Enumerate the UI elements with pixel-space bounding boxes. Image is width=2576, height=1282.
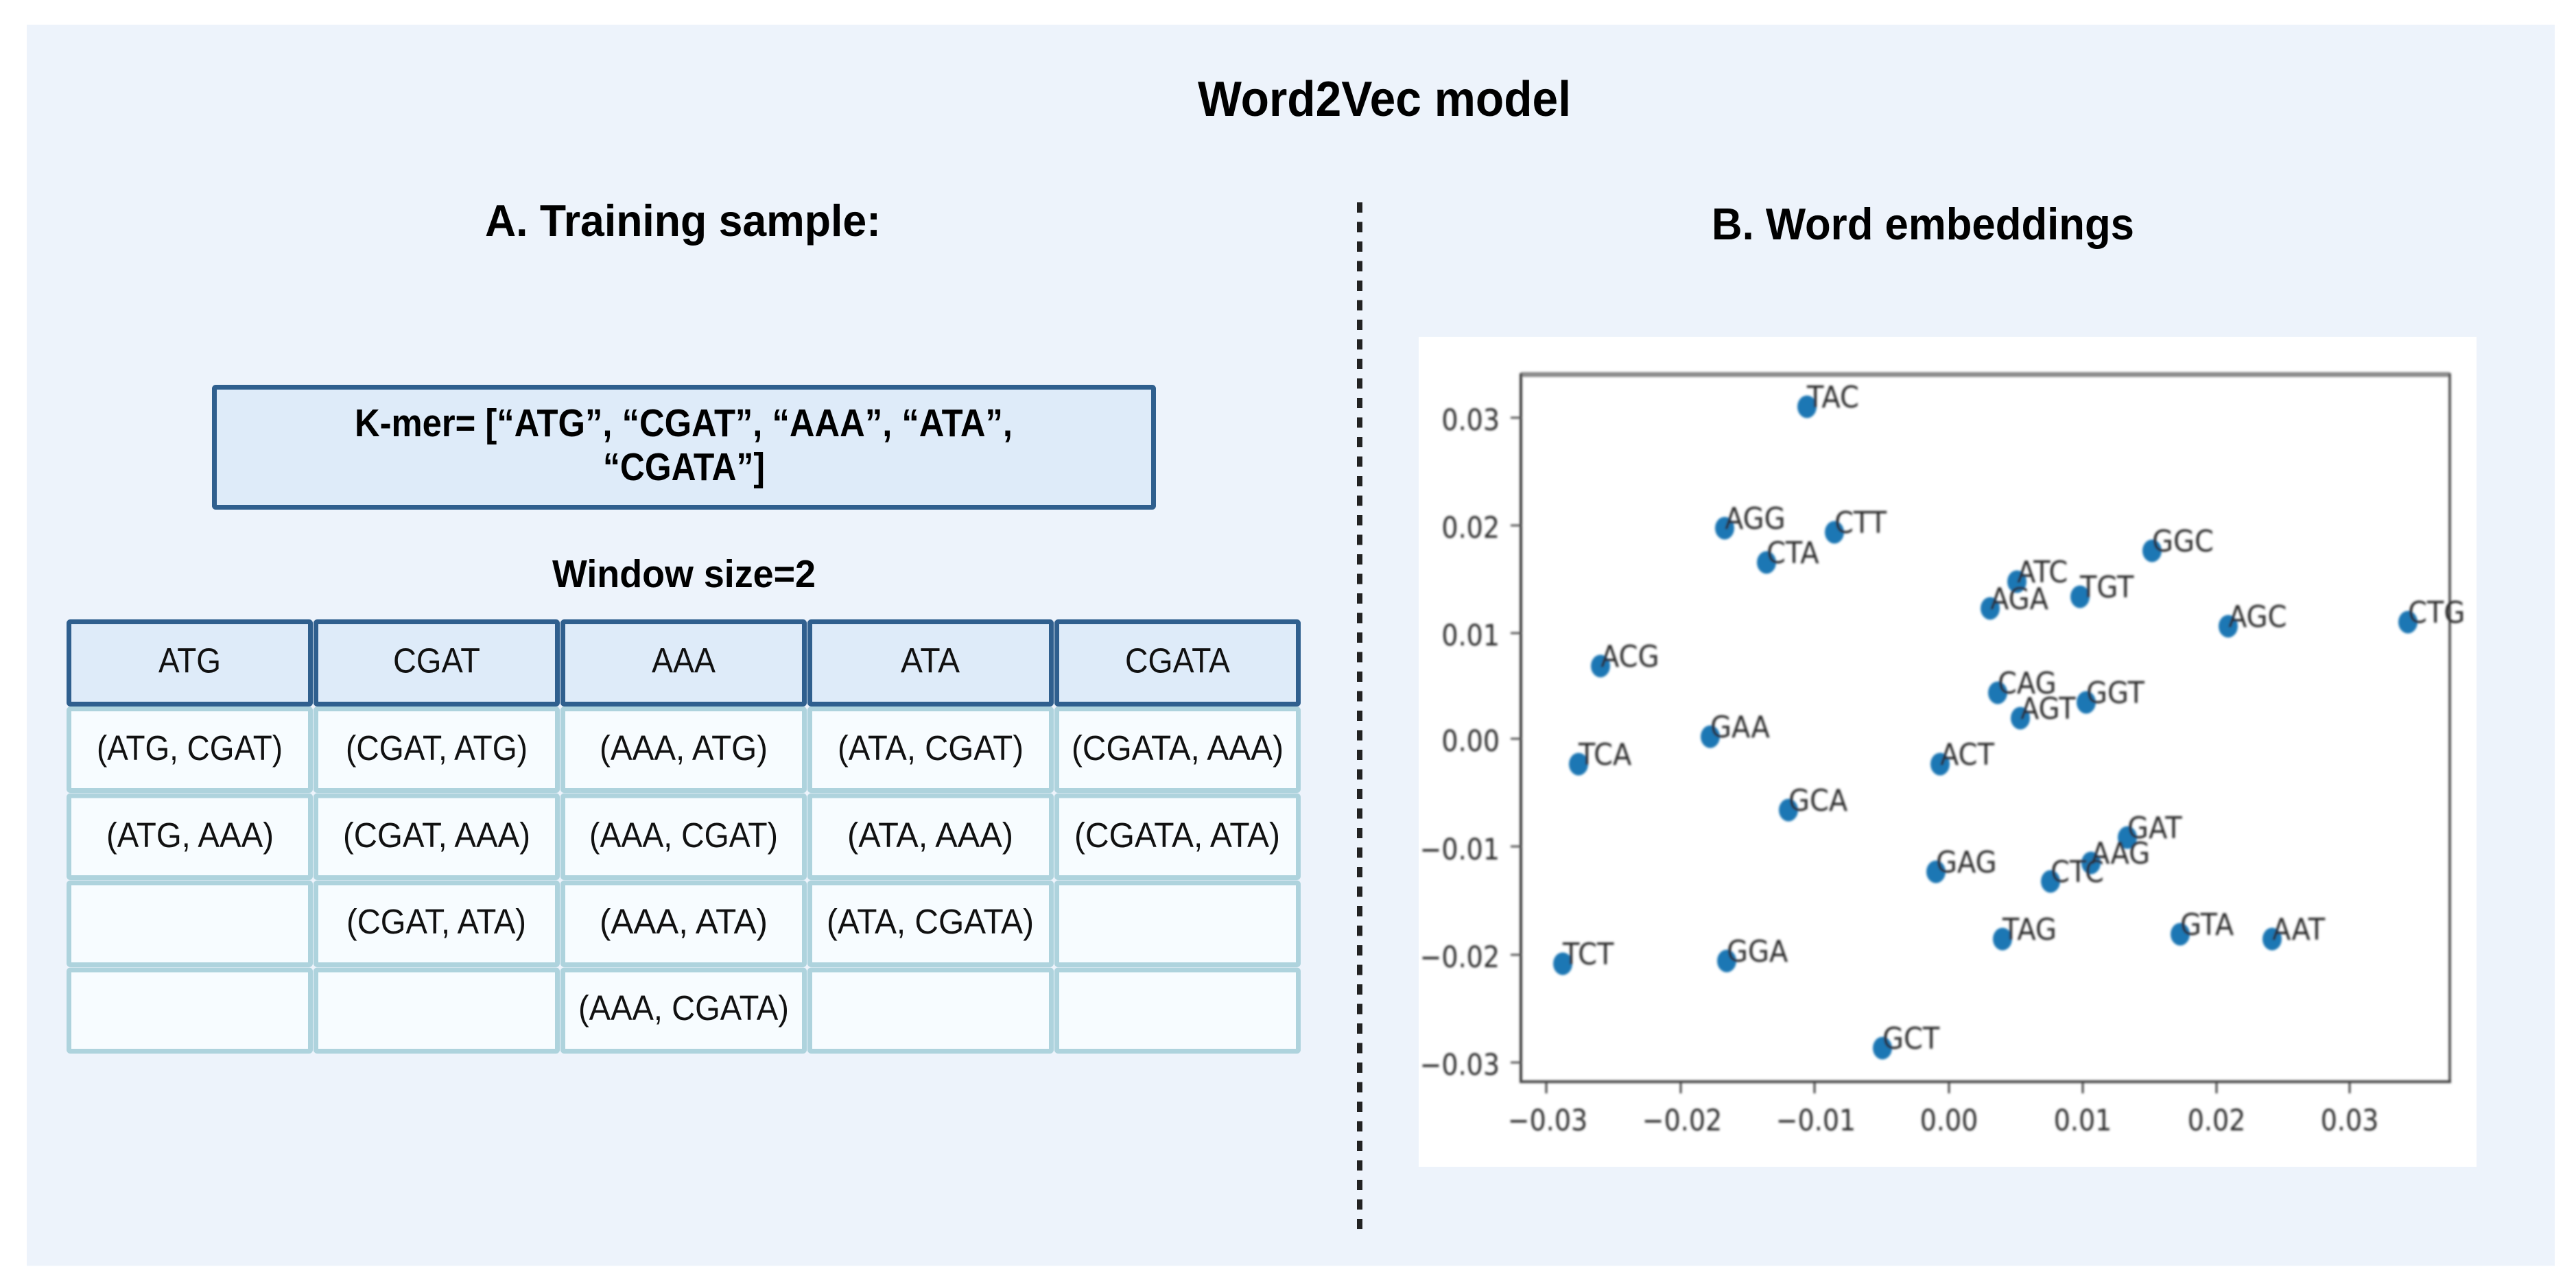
point labels: [1562, 379, 2465, 1056]
point labels: GAT: [2127, 810, 2182, 845]
scatter chart: [1420, 373, 2465, 1138]
panel A: training sample: [69, 387, 1298, 1051]
x axis tick labels: 0.01: [2054, 1103, 2112, 1138]
point labels: CTC: [2051, 854, 2104, 889]
table pair text: (CGATA, ATA): [1074, 816, 1280, 855]
point labels: GGT: [2086, 675, 2144, 710]
table pair text: (AAA, ATG): [600, 728, 768, 768]
y axis tick labels: 0.02: [1441, 510, 1500, 545]
table pair text: (CGAT, AAA): [343, 816, 530, 855]
point labels: AGC: [2228, 599, 2287, 634]
x axis tick labels: −0.03: [1508, 1103, 1587, 1138]
point labels: GAA: [1710, 709, 1770, 744]
table header text: CGAT: [393, 641, 480, 680]
y axis tick labels: 0.00: [1441, 724, 1500, 759]
point labels: TAG: [2002, 912, 2057, 947]
x axis tick labels: −0.01: [1776, 1103, 1856, 1138]
y axis tick labels: −0.02: [1420, 940, 1500, 975]
point labels: GCT: [1882, 1021, 1940, 1056]
point labels: AAG: [2091, 835, 2150, 870]
table pair text: (ATA, CGATA): [827, 902, 1034, 941]
table pair text: (AAA, CGAT): [589, 816, 778, 855]
y axis tick labels: 0.03: [1441, 403, 1500, 438]
point labels: AGA: [1990, 581, 2048, 616]
y axis tick labels: [1420, 403, 1500, 1082]
point labels: CTT: [1834, 505, 1887, 540]
point labels: TAC: [1806, 379, 1859, 414]
table pair text: (AAA, ATA): [600, 902, 768, 941]
point labels: ATC: [2017, 554, 2068, 589]
k-mer list box: [214, 387, 1154, 508]
point labels: GCA: [1788, 783, 1847, 818]
point labels: ACG: [1600, 639, 1659, 674]
point labels: TGT: [2079, 569, 2134, 604]
table pair text: (ATG, CGAT): [97, 728, 283, 768]
x axis tick labels: 0.00: [1920, 1103, 1978, 1138]
table pair text: (CGATA, AAA): [1072, 728, 1284, 768]
point labels: TCA: [1578, 737, 1632, 772]
x axis tick labels: −0.02: [1642, 1103, 1722, 1138]
table header text: AAA: [652, 641, 716, 680]
training pairs table: [69, 621, 1298, 1051]
x axis tick labels: 0.02: [2188, 1103, 2245, 1138]
table header cells: [69, 621, 1298, 704]
y axis tick labels: −0.03: [1420, 1047, 1500, 1082]
panel B: word embeddings scatter plot: [1419, 337, 2477, 1167]
table header text: ATG: [158, 641, 221, 680]
heading: B. Word embeddings: B. Word embeddings: [1712, 199, 2134, 249]
table pair text: (CGAT, ATG): [346, 728, 528, 768]
point labels: AGG: [1725, 501, 1786, 536]
table pair text: (CGAT, ATA): [346, 902, 526, 941]
table pair text: (ATA, CGAT): [838, 728, 1024, 768]
point labels: CTA: [1766, 535, 1819, 570]
point labels: ACT: [1940, 737, 1994, 772]
table pair text: (AAA, CGATA): [578, 988, 789, 1028]
table pair text: [97, 728, 1284, 1028]
point labels: AAT: [2272, 912, 2325, 947]
table header text: CGATA: [1125, 641, 1230, 680]
table body cells: [69, 709, 1298, 1051]
y axis tick labels: −0.01: [1420, 832, 1500, 867]
x axis tick labels: 0.03: [2321, 1103, 2378, 1138]
table pair text: (ATA, AAA): [847, 816, 1013, 855]
point labels: AGT: [2020, 691, 2076, 726]
window size label: Window size=2: [552, 552, 816, 596]
panel divider: dashed vertical line: [1357, 202, 1362, 1238]
point labels: CTG: [2408, 595, 2465, 630]
table header text: ATA: [901, 641, 960, 680]
chart axes and ticks: [1511, 373, 2451, 1093]
point labels: GGA: [1727, 934, 1788, 969]
point labels: TCT: [1562, 936, 1614, 971]
k-mer list box: K-mer= [“ATG”, “CGAT”, “AAA”, “ATA”,: [355, 401, 1013, 445]
heading: A. Training sample: A. Training sample:: [485, 195, 881, 246]
point labels: GTA: [2180, 907, 2234, 942]
title: Word2Vec model: [1198, 72, 1571, 127]
point labels: CAG: [1998, 665, 2057, 700]
x axis tick labels: [1508, 1103, 2378, 1138]
scatter points: [1553, 395, 2418, 1059]
table pair text: (ATG, AAA): [106, 816, 274, 855]
table header text: [158, 641, 1230, 680]
point labels: GAG: [1936, 844, 1997, 879]
y axis tick labels: 0.01: [1441, 618, 1500, 653]
k-mer list box: “CGATA”]: [603, 445, 765, 489]
point labels: GGC: [2152, 523, 2214, 558]
plot background: [1419, 337, 2477, 1167]
